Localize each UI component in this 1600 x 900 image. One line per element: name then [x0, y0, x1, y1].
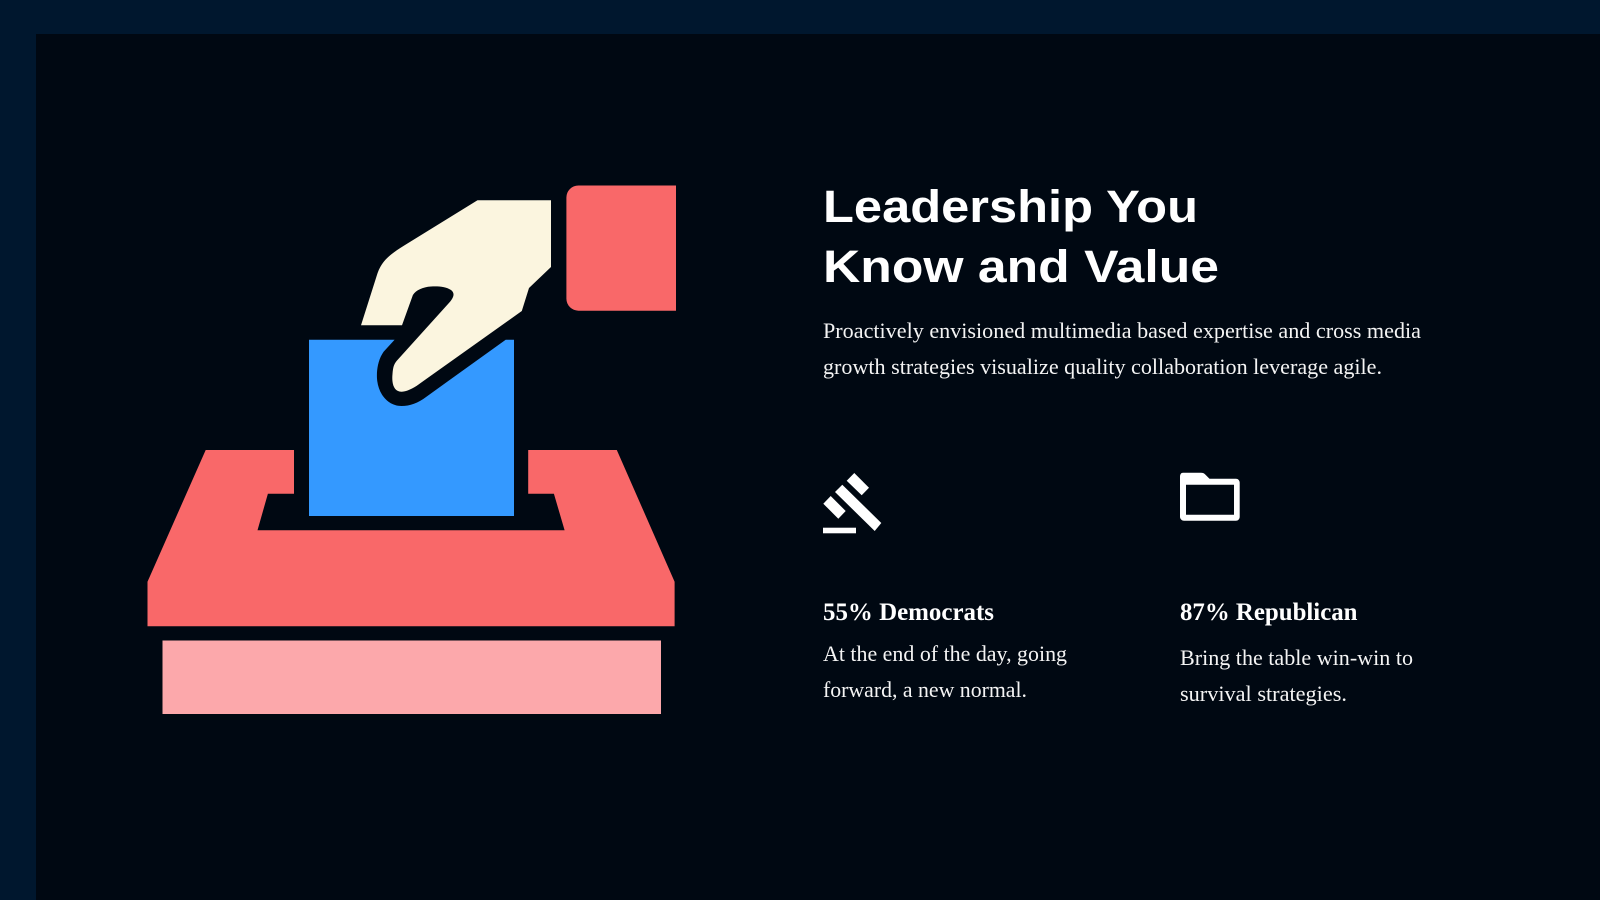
stat description [823, 641, 1067, 702]
stat description: At the end of the day, going [823, 641, 1067, 666]
icon: folder [1180, 473, 1240, 521]
ballot paper [309, 340, 514, 516]
intro paragraph: Proactively envisioned multimedia based expertise and cross media [823, 318, 1421, 343]
illustration: hand casting ballot into box [148, 186, 676, 714]
sleeve cuff [566, 186, 676, 311]
intro paragraph [823, 318, 1421, 379]
stat heading: 87% Republican [1180, 599, 1358, 626]
stat description: survival strategies. [1180, 681, 1347, 706]
title: Know and Value [823, 241, 1219, 292]
hand [361, 200, 551, 392]
title [823, 181, 1219, 292]
ballot box base [162, 640, 661, 714]
icon: gavel [823, 473, 881, 533]
stat description [1180, 645, 1413, 706]
stat: democrats [823, 599, 1067, 702]
stat description: forward, a new normal. [823, 677, 1027, 702]
intro paragraph: growth strategies visualize quality collaboration leverage agile. [823, 354, 1382, 379]
stat heading: 55% Democrats [823, 599, 994, 626]
ballot box top [148, 450, 675, 626]
stat description: Bring the table win-win to [1180, 645, 1413, 670]
title: Leadership You [823, 181, 1198, 232]
stat: republican [1180, 599, 1413, 706]
